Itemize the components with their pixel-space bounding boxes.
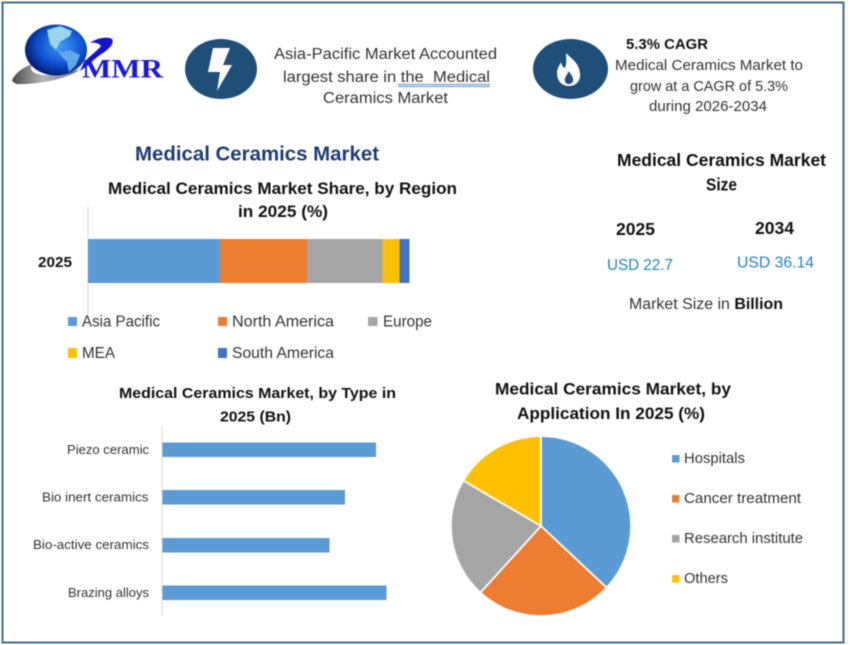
callout: Asia-Pacific [274,46,497,107]
callout: CAGR: Medical Ceramics Market to [615,57,803,74]
legend: Cancer treatment [684,491,801,507]
panel: share by region [38,179,457,362]
pie chart [452,437,630,615]
legend: Research institute [684,531,803,547]
2034 value: USD 36.14 [737,254,814,272]
2034 value: 2034 [755,218,794,238]
2025 value: USD 22.7 [607,257,673,274]
market size heading: Medical Ceramics Market [617,150,826,170]
horizontal bar chart: Piezo ceramic [67,442,149,457]
chart title [119,385,396,426]
horizontal bar chart: Bio-active ceramics [33,537,150,552]
icon: flame [533,39,608,99]
panel: by application [452,380,803,615]
logo: MMR [12,24,163,84]
horizontal bar chart: Bio inert ceramics [42,490,149,504]
2025 value: 2025 [616,219,655,239]
panel: market size [607,150,826,313]
legend [68,314,432,362]
horizontal bar chart: Brazing alloys [68,585,149,600]
size unit note: Market Size in Billion [629,296,783,313]
2034 value [737,218,814,272]
chart title: Application In 2025 (%) [517,404,705,423]
legend: South America [232,345,334,362]
chart title: Medical Ceramics Market, by Type in [119,385,396,402]
callout: CAGR [615,37,803,115]
main heading: Medical Ceramics Market [135,144,379,166]
chart title [108,179,457,221]
legend: North America [232,314,334,330]
market size heading: Size [706,174,737,194]
legend: Europe [383,314,432,330]
stacked bar chart: 2025 [38,254,72,271]
callout: Asia-Pacific: Asia-Pacific Market Accounted [274,46,497,63]
chart title: in 2025 (%) [238,202,328,221]
callout: Asia-Pacific: largest share in the Medical [283,69,490,86]
icon: globe with swoosh [12,24,113,84]
logo wordmark: MMR [82,54,163,84]
legend: MEA [82,345,116,362]
icon: lightning bolt [185,39,257,99]
callout: CAGR: during 2026-2034 [649,98,767,115]
market size heading [617,150,826,194]
legend [672,451,803,587]
chart title: 2025 (Bn) [220,408,291,426]
legend: Asia Pacific [82,314,160,330]
callout: Asia-Pacific: Ceramics Market [323,90,449,107]
callout: CAGR: 5.3% CAGR [626,37,709,53]
chart title: Medical Ceramics Market, by [495,380,732,398]
chart title [495,380,732,423]
stacked bar chart [38,206,410,316]
callout: CAGR: grow at a CAGR of 5.3% [630,78,788,95]
panel: by type [33,385,396,616]
horizontal bar chart [33,426,386,616]
legend: Others [684,571,728,587]
legend: Hospitals [684,451,745,467]
2025 value [607,219,673,274]
chart title: Medical Ceramics Market Share, by Region [108,179,457,198]
